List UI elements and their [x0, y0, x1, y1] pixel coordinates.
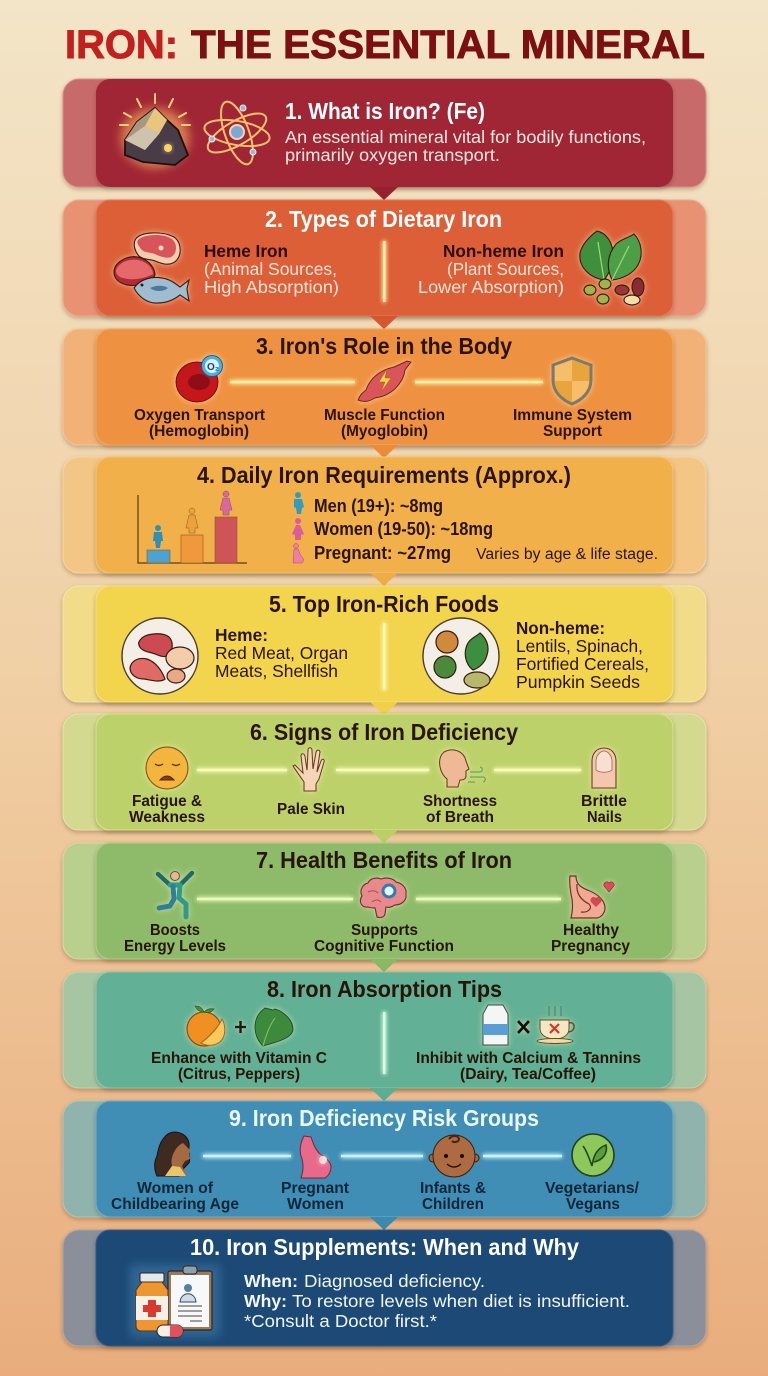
labels — [111, 1180, 640, 1213]
arrow 5 — [370, 702, 398, 715]
heading: 4. Daily Iron Requirements (Approx.) — [197, 462, 571, 488]
icon: baby — [429, 1135, 479, 1177]
labels — [129, 793, 627, 826]
labels: (Dairy, Tea/Coffee) — [460, 1066, 596, 1083]
heme foods text — [215, 625, 348, 681]
heme text: Heme Iron — [204, 241, 288, 261]
when and why text: *Consult a Doctor first.* — [244, 1311, 437, 1331]
heading: 3. Iron's Role in the Body — [256, 333, 512, 359]
non-heme text: (Plant Sources, — [447, 259, 564, 279]
labels: Brittle — [581, 793, 627, 810]
arrow 1 — [370, 187, 398, 200]
icon: pregnant woman — [300, 1136, 331, 1178]
labels: of Breath — [426, 809, 494, 826]
labels: Weakness — [129, 809, 205, 826]
labels: Cognitive Function — [314, 938, 454, 955]
labels: Vegans — [566, 1196, 620, 1213]
divider — [383, 241, 386, 302]
labels: Enhance with Vitamin C — [151, 1050, 327, 1067]
title: IRON: — [65, 23, 178, 67]
arrow 2 — [370, 316, 398, 329]
when and why text: Diagnosed deficiency. — [304, 1271, 485, 1291]
heading: 2. Types of Dietary Iron — [265, 206, 502, 232]
non-heme foods text: Non-heme: — [516, 618, 605, 638]
non-heme foods text: Pumpkin Seeds — [516, 672, 640, 692]
icon: meat and fish — [114, 233, 189, 303]
note: Varies by age & life stage. — [476, 546, 658, 563]
non-heme foods text: Lentils, Spinach, — [516, 636, 643, 656]
heme foods text: Meats, Shellfish — [215, 661, 338, 681]
connector lines — [230, 381, 543, 383]
icon: iron rock — [120, 94, 190, 168]
labels — [134, 407, 632, 440]
labels: Energy Levels — [124, 938, 226, 955]
labels: Oxygen Transport — [134, 407, 266, 424]
when and why text — [244, 1271, 630, 1331]
icon: vegan leaf — [572, 1134, 614, 1176]
icon: muscle — [358, 361, 411, 401]
requirement values: Men (19+): ~8mg — [314, 496, 443, 516]
labels: Nails — [587, 809, 622, 826]
labels: Women of — [137, 1180, 214, 1197]
icon: brittle nail — [592, 748, 616, 788]
list icons — [292, 492, 304, 563]
description: An essential mineral vital for bodily functions, — [285, 127, 646, 147]
panel 7: health benefits — [63, 843, 706, 959]
icon: atom — [202, 98, 272, 168]
icon: bottle and clipboard — [130, 1265, 220, 1337]
non-heme text: Non-heme Iron — [443, 241, 564, 261]
panel 5: iron rich foods — [63, 586, 706, 702]
non-heme foods text: Fortified Cereals, — [516, 654, 649, 674]
panel 10: supplements — [63, 1230, 706, 1346]
requirement values — [314, 496, 493, 563]
labels: Pregnant — [281, 1180, 350, 1197]
icon: red blood cell with oxygen: O₂ — [207, 362, 219, 373]
labels: Pale Skin — [277, 801, 345, 818]
arrow 4 — [370, 573, 398, 586]
labels — [151, 1050, 641, 1083]
arrow 7 — [370, 959, 398, 972]
non-heme foods text — [516, 618, 649, 692]
panel 3: role in the body — [63, 329, 706, 445]
labels: Boosts — [150, 922, 200, 939]
requirement values: Pregnant: ~27mg — [314, 543, 451, 563]
panel 2: types of dietary iron — [63, 200, 706, 316]
heme text: (Animal Sources, — [204, 259, 337, 279]
icon: hand — [293, 748, 324, 791]
connector lines — [203, 1155, 562, 1157]
title: THE ESSENTIAL MINERAL — [191, 23, 705, 67]
icon: brain — [360, 878, 406, 918]
arrow 3 — [370, 445, 398, 458]
labels — [124, 922, 630, 955]
description — [285, 127, 646, 165]
icon: milk and tea — [483, 1005, 574, 1045]
labels: Infants & — [420, 1180, 486, 1197]
heading: 8. Iron Absorption Tips — [267, 976, 502, 1002]
icon: spinach and beans — [580, 231, 644, 305]
labels: Vegetarians/ — [545, 1180, 640, 1197]
description: primarily oxygen transport. — [285, 145, 500, 165]
icon: head breathing — [440, 750, 485, 787]
labels: Support — [543, 423, 603, 440]
non-heme text: Lower Absorption) — [418, 277, 564, 297]
labels: (Citrus, Peppers) — [178, 1066, 300, 1083]
heading: 10. Iron Supplements: When and Why — [190, 1234, 579, 1260]
labels: Shortness — [423, 793, 497, 810]
icon: woman — [155, 1132, 191, 1176]
bar chart — [138, 491, 247, 563]
arrow 9 — [370, 1217, 398, 1230]
icon: red blood cell with oxygen — [176, 356, 222, 402]
connector lines — [197, 769, 581, 771]
labels: (Hemoglobin) — [149, 423, 249, 440]
labels: Supports — [351, 922, 418, 939]
labels: Healthy — [563, 922, 619, 939]
icon: non-heme plate — [423, 618, 499, 694]
when and why text: Why: — [244, 1291, 287, 1311]
panel 8: absorption tips — [63, 972, 706, 1088]
labels: (Myoglobin) — [341, 423, 428, 440]
labels: Immune System — [513, 407, 632, 424]
labels: Women — [287, 1196, 344, 1213]
labels: Children — [422, 1196, 484, 1213]
labels: Pregnancy — [551, 938, 630, 955]
panel 4: daily requirements — [63, 457, 706, 573]
labels: Inhibit with Calcium & Tannins — [416, 1050, 641, 1067]
labels: Childbearing Age — [111, 1196, 239, 1213]
labels: Fatigue & — [132, 793, 202, 810]
icon: healthy pregnancy — [570, 876, 614, 918]
heme text: High Absorption) — [204, 277, 339, 297]
icon: shield — [553, 358, 591, 404]
arrow 8 — [370, 1088, 398, 1101]
icon: tired face — [146, 747, 188, 789]
heading: 9. Iron Deficiency Risk Groups — [229, 1105, 539, 1131]
when and why text: When: — [244, 1271, 298, 1291]
connector lines — [197, 898, 561, 900]
heading: 7. Health Benefits of Iron — [256, 847, 512, 873]
panel 9: risk groups — [63, 1101, 706, 1217]
heading: 6. Signs of Iron Deficiency — [250, 719, 518, 745]
requirement values: Women (19-50): ~18mg — [314, 519, 493, 539]
icon: energetic person — [158, 872, 192, 917]
heme foods text: Red Meat, Organ — [215, 643, 348, 663]
arrow 6 — [370, 830, 398, 843]
when and why text: To restore levels when diet is insufficient. — [292, 1291, 630, 1311]
heading: 1. What is Iron? (Fe) — [285, 98, 485, 124]
labels: Muscle Function — [324, 407, 445, 424]
heme foods text: Heme: — [215, 625, 268, 645]
icon: heme plate — [122, 618, 198, 694]
heme text — [204, 241, 339, 297]
non-heme text — [418, 241, 564, 297]
divider — [383, 1012, 386, 1074]
icon: orange plus spinach — [187, 1006, 293, 1046]
panel 6: signs of deficiency — [63, 714, 706, 830]
divider — [383, 623, 386, 690]
heading: 5. Top Iron-Rich Foods — [269, 591, 499, 617]
panel 1: what is iron — [63, 79, 706, 187]
